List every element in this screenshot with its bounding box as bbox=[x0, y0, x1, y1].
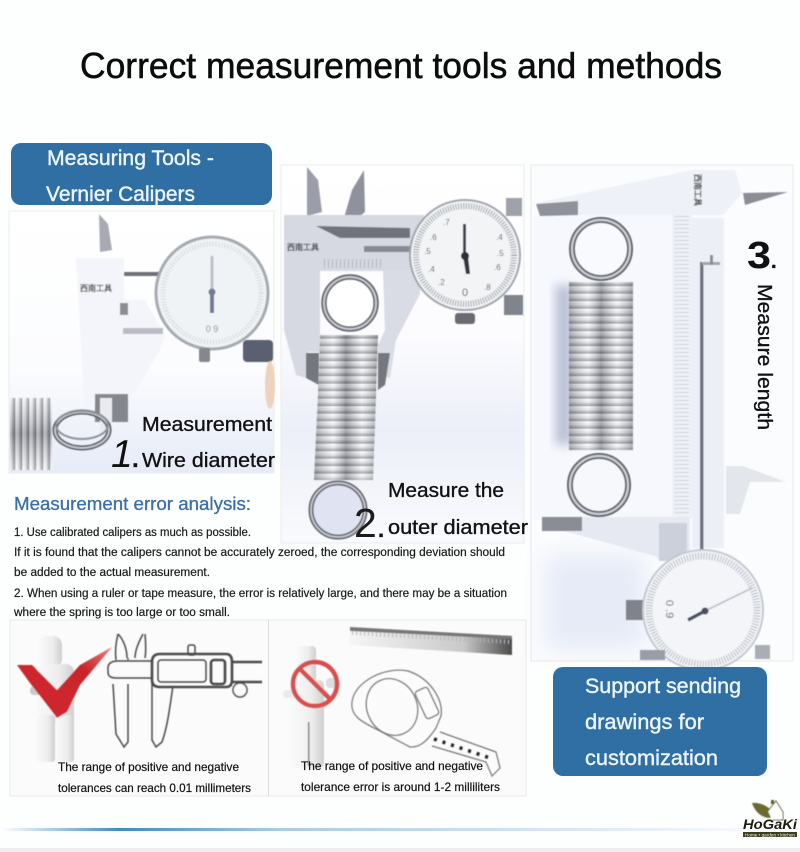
dial gauge, panel 3: 0 .9 bbox=[663, 600, 675, 618]
label: outer diameter: 2 bbox=[354, 500, 377, 546]
dial gauge, panel 2: .5 bbox=[424, 247, 431, 256]
label: measure length: . bbox=[771, 251, 777, 273]
label: outer diameter: outer diameter bbox=[388, 516, 528, 539]
panel: length measurement bbox=[531, 165, 793, 670]
dial gauge, panel 2 bbox=[410, 200, 520, 324]
extension spring, panel 3 bbox=[569, 220, 633, 514]
analysis paragraphs: 2. When using a ruler or tape measure, the error is relatively large, and there may be a situation bbox=[14, 588, 507, 600]
callout: support sending drawings: drawings for bbox=[585, 711, 704, 734]
label: measure length bbox=[747, 235, 777, 430]
analysis paragraphs: 1. Use calibrated calipers as much as possible. bbox=[14, 527, 251, 539]
dial gauge, panel 2: 0 bbox=[462, 287, 468, 299]
tape measure outline bbox=[352, 670, 500, 776]
text block: measurement error analysis bbox=[13, 493, 507, 619]
logo: HoGaKi bbox=[743, 800, 798, 838]
label: wire diameter: . bbox=[132, 446, 139, 473]
heading: error analysis: Measurement error analysis: bbox=[14, 493, 251, 514]
label: tape tolerance bbox=[301, 759, 500, 794]
steel ruler bbox=[349, 627, 512, 655]
label: caliper tolerance: The range of positive and negative bbox=[58, 760, 239, 774]
figure holding red check mark bbox=[17, 636, 112, 762]
dial gauge, panel 2: .6 bbox=[494, 263, 501, 272]
dial gauge, panel 2: .4 bbox=[428, 265, 435, 274]
heading box: measuring tools: Measuring Tools - bbox=[47, 147, 214, 170]
digital caliper outline bbox=[108, 634, 262, 747]
dial gauge, panel 2: .7 bbox=[443, 218, 450, 227]
callout: support sending drawings bbox=[553, 667, 767, 776]
label: measure length: Measure length bbox=[753, 284, 776, 430]
heading box: measuring tools: Vernier Calipers bbox=[46, 183, 195, 206]
label: wire diameter: Measurement bbox=[142, 413, 272, 436]
logo: HoGaKi: HoGaKi bbox=[743, 816, 798, 832]
caliper body, panel 2 bbox=[284, 167, 523, 390]
dial gauge, panel 1: 0 9 bbox=[206, 324, 218, 334]
icon: house and leaf bbox=[752, 800, 783, 820]
panel: outer diameter measurement bbox=[281, 165, 528, 546]
label: wire diameter: 1 bbox=[111, 433, 133, 476]
dial gauge, panel 2: .4 bbox=[496, 233, 503, 242]
decorative footer rule bbox=[0, 828, 800, 831]
label: wire diameter: Wire diameter bbox=[142, 449, 275, 472]
heading box: measuring tools bbox=[11, 143, 272, 206]
label: wire diameter bbox=[111, 413, 275, 476]
label: tape tolerance: The range of positive and negative bbox=[301, 759, 483, 773]
panel: comparison of tools bbox=[10, 620, 526, 796]
label: outer diameter bbox=[354, 479, 528, 546]
dial gauge, panel 1 bbox=[156, 237, 268, 362]
label: outer diameter: . bbox=[378, 517, 384, 542]
caliper body, panel 3: 西南工具 bbox=[693, 174, 703, 206]
spring and hook, panel 1 bbox=[10, 398, 109, 470]
figure with prohibition sign bbox=[283, 646, 340, 768]
dial gauge, panel 2: .5 bbox=[497, 249, 504, 258]
panel: wire diameter measurement bbox=[9, 211, 275, 476]
label: caliper tolerance: tolerances can reach 0.01 millimeters bbox=[58, 781, 251, 795]
label: measure length: 3 bbox=[747, 235, 771, 277]
caliper body, panel 3 bbox=[536, 170, 788, 561]
title: Correct measurement tools and methods bbox=[80, 45, 722, 86]
label: tape tolerance: tolerance error is around 1-2 milliliters bbox=[301, 780, 500, 794]
analysis paragraphs: where the spring is too large or too small. bbox=[13, 607, 230, 619]
analysis paragraphs bbox=[13, 527, 507, 619]
dial gauge, panel 2: .8 bbox=[484, 283, 491, 292]
label: caliper tolerance bbox=[58, 760, 251, 795]
caliper body, panel 1 bbox=[76, 214, 275, 432]
dial gauge, panel 3 bbox=[626, 550, 770, 670]
caliper body, panel 2: 西南工具 bbox=[287, 242, 319, 252]
extension spring, panel 2 bbox=[311, 277, 378, 537]
dial gauge, panel 2: .6 bbox=[430, 233, 437, 242]
dial gauge, panel 2: .2 bbox=[438, 278, 445, 287]
callout: support sending drawings: customization bbox=[585, 747, 718, 770]
logo: HoGaKi: Home • garden • kitchen bbox=[745, 832, 796, 838]
analysis paragraphs: If it is found that the calipers cannot be accurately zeroed, the corresponding deviation should bbox=[14, 547, 505, 559]
analysis paragraphs: be added to the actual measurement. bbox=[14, 567, 210, 579]
caliper body, panel 1: 西南工具 bbox=[80, 283, 112, 293]
label: outer diameter: Measure the bbox=[388, 479, 504, 502]
callout: support sending drawings: Support sending bbox=[585, 675, 741, 698]
